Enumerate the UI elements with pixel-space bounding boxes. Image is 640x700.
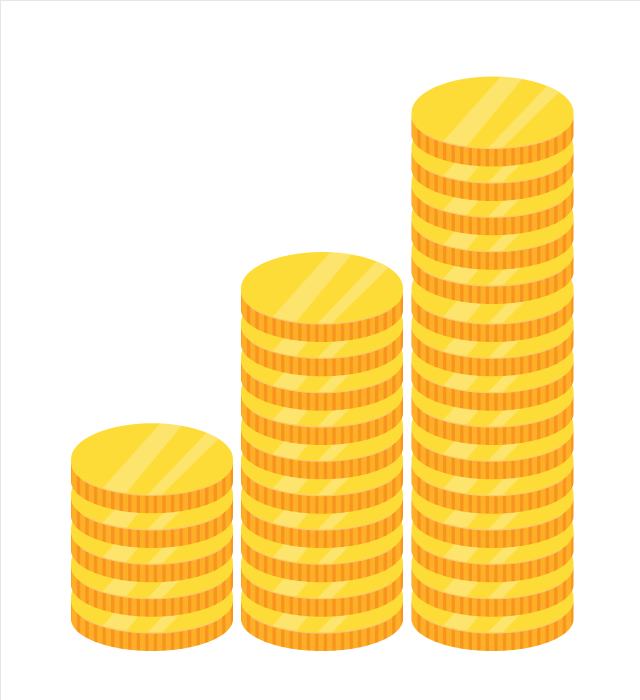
right stack: 15 coins <box>409 72 575 653</box>
left stack: 5 coins <box>68 419 234 653</box>
middle stack: 10 coins <box>238 248 404 653</box>
